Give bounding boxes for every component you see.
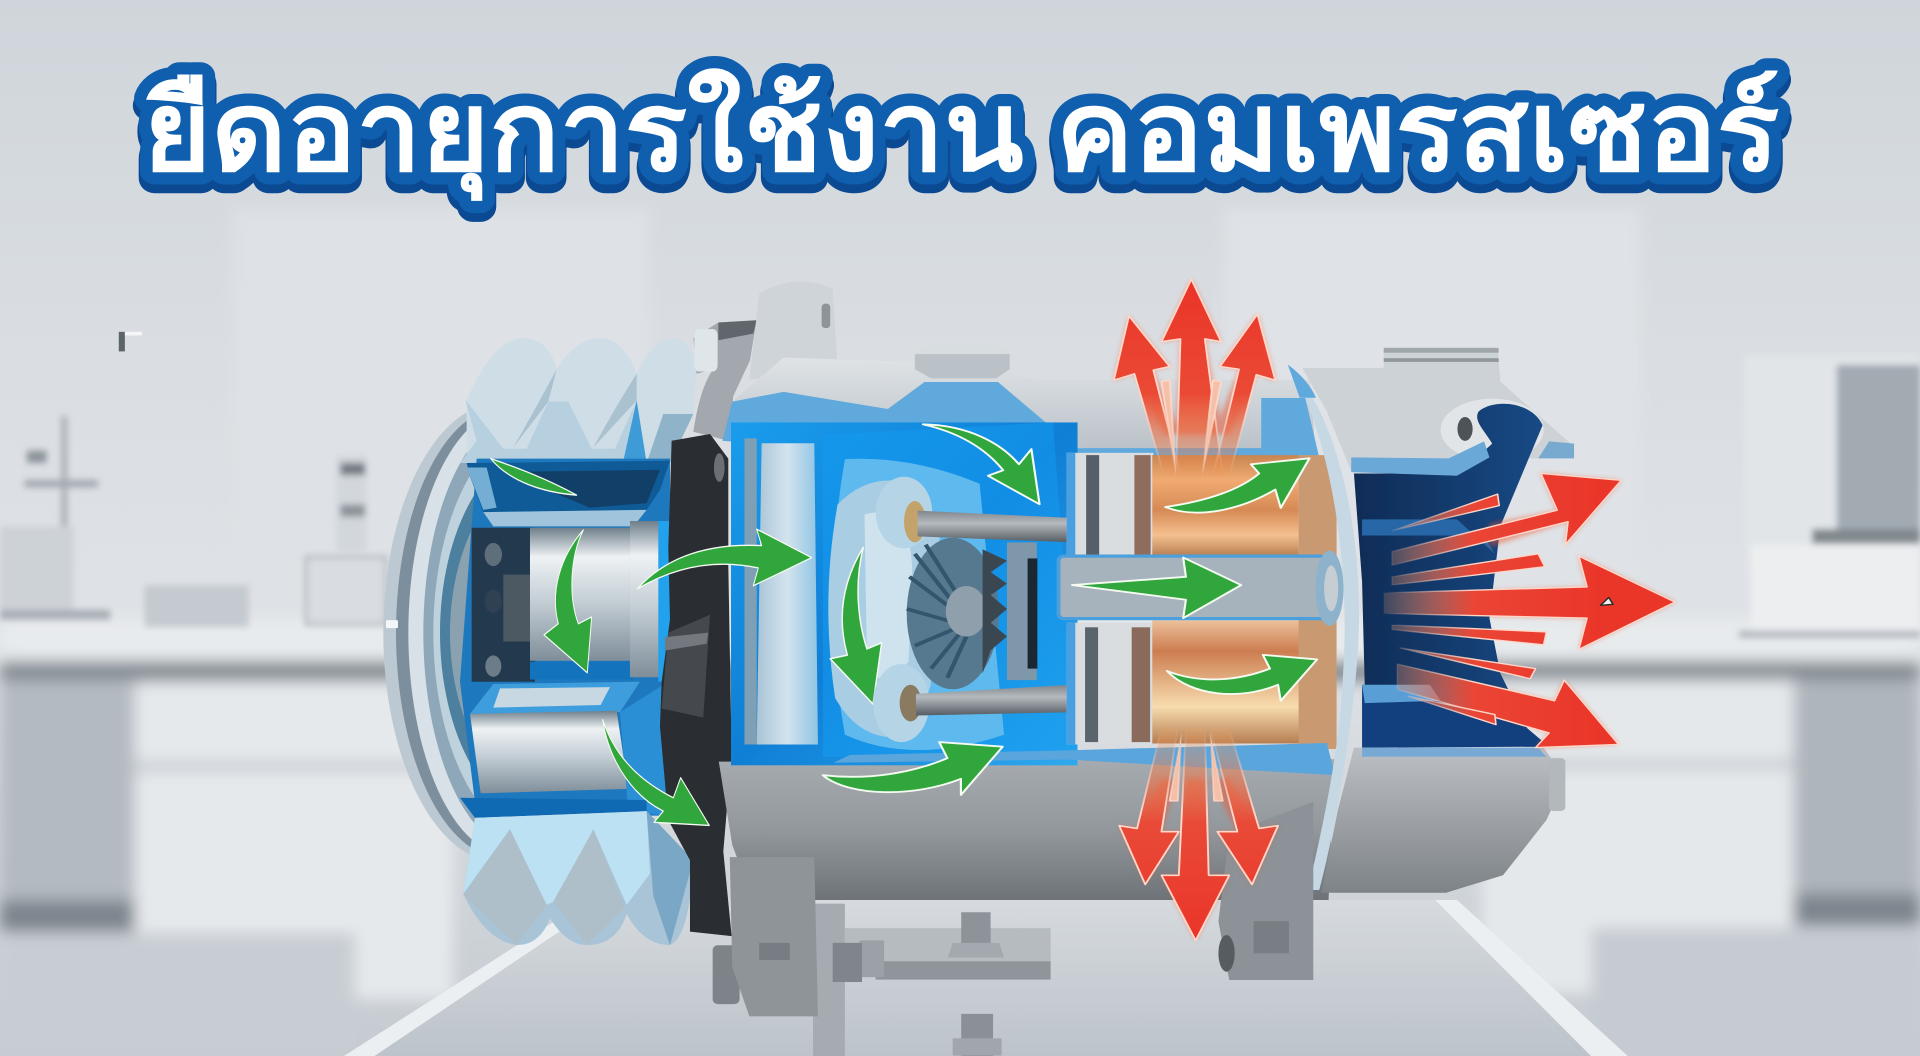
bottom red heat arrows xyxy=(1119,728,1278,940)
bearing and shaft xyxy=(472,521,670,682)
lower heated chamber xyxy=(1152,620,1304,743)
bright blue mechanism chamber xyxy=(731,422,1078,765)
wobble plate xyxy=(828,480,940,737)
compressor body upper casing xyxy=(722,358,1322,471)
upper heated chamber xyxy=(1152,455,1299,555)
pulley fins bottom xyxy=(463,811,693,945)
hex bolt xyxy=(915,344,1010,378)
heat glow xyxy=(1114,279,1675,940)
compressor xyxy=(383,279,1675,1016)
turbine and gear xyxy=(907,538,1037,689)
stray mark xyxy=(119,332,142,351)
piston connecting rods xyxy=(873,477,1073,742)
compressor body lower casing xyxy=(719,759,1335,1016)
lower blue rim xyxy=(834,743,1335,775)
arrow through flange xyxy=(637,529,812,589)
mounting bracket xyxy=(713,904,1051,1056)
clutch inflow arrows xyxy=(491,459,709,825)
upper piston xyxy=(1067,453,1153,555)
black flange xyxy=(660,320,757,936)
pulley fins top xyxy=(460,338,697,463)
title: ยืดอายุการใช้งาน คอมเพรสเซอร์ xyxy=(143,68,1779,202)
rear housing bottom xyxy=(1321,748,1565,893)
lab equipment right xyxy=(1739,355,1920,638)
top red heat arrows xyxy=(1114,279,1275,476)
green flow arrows xyxy=(823,424,1317,795)
section arrow down wobble plate xyxy=(830,547,882,704)
title: ยืดอายุการใช้งาน คอมเพรสเซอร์ xyxy=(143,76,1779,210)
table top xyxy=(343,900,1629,1056)
central bar xyxy=(1058,551,1344,626)
mounting ear top xyxy=(749,281,838,380)
pulley and clutch section xyxy=(383,320,757,945)
discharge cavity xyxy=(1351,404,1574,748)
pulley front disc xyxy=(383,403,663,862)
clutch blue cavity xyxy=(460,459,670,816)
lab equipment left xyxy=(0,416,386,627)
side plate xyxy=(1288,365,1359,890)
rear compressor section xyxy=(823,279,1675,980)
rear housing top xyxy=(1302,347,1574,476)
lower clutch block xyxy=(460,682,668,818)
right red discharge arrows xyxy=(1384,473,1675,748)
rear mounting foot xyxy=(1218,802,1313,980)
chamber block and right housing base xyxy=(1299,455,1337,749)
lower piston xyxy=(1067,623,1153,744)
